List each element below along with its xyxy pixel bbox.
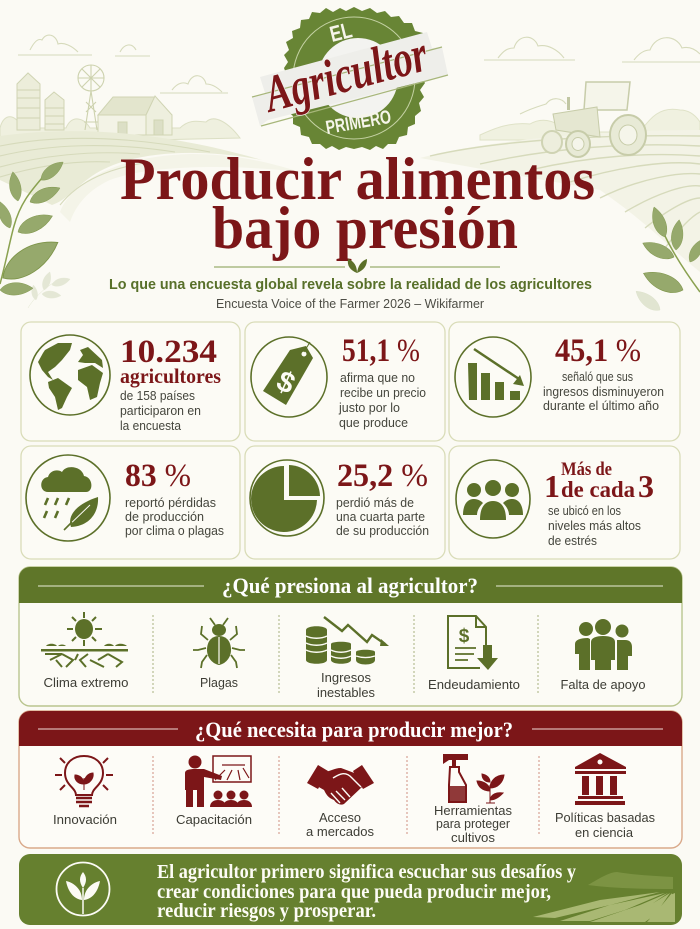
- icon: plant in circle: [56, 862, 110, 916]
- stat text: durante el último año: [543, 399, 659, 413]
- stat text: [544, 459, 654, 548]
- tractor: [542, 82, 646, 157]
- icon: pie chart: [250, 460, 324, 536]
- panel header: [19, 711, 682, 746]
- divider with sprout: [214, 259, 500, 273]
- title: bajo presión: [212, 195, 518, 261]
- stat text: señaló que sus: [562, 370, 633, 384]
- panel: income stat: [449, 322, 680, 441]
- icon: globe: [30, 335, 110, 415]
- item: market access: [306, 765, 374, 839]
- stat text: justo por lo: [338, 401, 400, 415]
- stat text: agricultores: [120, 364, 221, 388]
- stat text: de cada: [561, 477, 635, 502]
- panel: stress stat: [449, 446, 680, 559]
- item: training: [176, 756, 252, 827]
- panel header: ¿Qué necesita para producir mejor?: [195, 717, 513, 742]
- item: crop protection tools: Herramientas: [434, 804, 512, 818]
- stat text: 1: [544, 468, 560, 504]
- stat text: [125, 458, 224, 538]
- item: unstable income: inestables: [317, 686, 375, 700]
- panel: fair price stat: [245, 322, 445, 441]
- silos: [17, 73, 64, 130]
- item: training: Capacitación: [176, 813, 252, 827]
- stat text: 83 %: [125, 458, 191, 494]
- source line: Encuesta Voice of the Farmer 2026 – Wikifarmer: [216, 297, 484, 311]
- stat text: [336, 458, 429, 538]
- icon: coin stacks and falling line: [306, 617, 389, 664]
- stat text: perdió más de: [336, 496, 414, 510]
- right field: [420, 130, 700, 272]
- panel header: [19, 567, 682, 603]
- icon: trainer at board with audience: [185, 756, 252, 807]
- stat text: una cuarta parte: [336, 510, 425, 524]
- clouds: [18, 35, 700, 114]
- closing message: El agricultor primero significa escuchar sus desafíos y: [157, 862, 576, 883]
- item: unstable income: [306, 617, 389, 700]
- icon: price tag: [251, 337, 327, 417]
- stat text: por clima o plagas: [125, 524, 224, 538]
- stat text: de estrés: [548, 534, 597, 548]
- stat text: 10.234: [120, 334, 217, 370]
- panel: production loss stat: [245, 446, 445, 559]
- stat text: participaron en: [120, 404, 201, 418]
- item: lack of support: [560, 619, 646, 692]
- icon: spray bottle and plant: [443, 754, 504, 803]
- stat text: de su producción: [336, 524, 429, 538]
- closing message: crear condiciones para que pueda producir mejor,: [157, 882, 551, 903]
- stat text: la encuesta: [120, 419, 181, 433]
- seal text: EL: [327, 17, 355, 47]
- item: pests: Plagas: [200, 676, 238, 690]
- left far trees: [0, 117, 240, 140]
- icon: document with down arrow: $: [459, 626, 470, 647]
- stat text: [338, 333, 426, 430]
- item: market access: Acceso: [319, 811, 361, 825]
- item: science-based policy: Políticas basadas: [555, 811, 655, 825]
- item: science-based policy: en ciencia: [575, 826, 633, 840]
- windmill: [78, 65, 104, 130]
- stat text: se ubicó en los: [548, 504, 621, 518]
- item: unstable income: Ingresos: [321, 671, 371, 685]
- icon: price tag: $: [272, 365, 300, 401]
- item: innovation: Innovación: [53, 813, 117, 827]
- item: lack of support: Falta de apoyo: [560, 678, 646, 692]
- icon: three standing people: [575, 619, 632, 670]
- icon: light bulb with sprout: [55, 756, 113, 806]
- stat text: de 158 países: [120, 389, 195, 403]
- panel: needs: [19, 711, 682, 848]
- item: science-based policy: [555, 753, 655, 840]
- logo seal: PRIMERO: [324, 107, 393, 139]
- stat text: 51,1 %: [342, 333, 420, 369]
- icon: beetle: [193, 618, 245, 668]
- stat text: 25,2 %: [337, 458, 428, 494]
- panel: farmers stat: [21, 322, 240, 441]
- item: debt: [428, 616, 520, 692]
- stat text: afirma que no: [340, 371, 415, 385]
- stat text: que produce: [339, 416, 408, 430]
- closing message: reducir riesgos y prosperar.: [157, 901, 376, 922]
- left leaves: [0, 158, 71, 308]
- closing message: [157, 862, 576, 922]
- banner field texture: [533, 872, 675, 922]
- item: market access: a mercados: [306, 825, 374, 839]
- panel: climate losses stat: [21, 446, 240, 559]
- item: crop protection tools: [434, 754, 512, 845]
- landscape illustration: [0, 35, 700, 272]
- icon: government building: [575, 753, 626, 805]
- logo seal: [252, 7, 448, 150]
- title: [120, 146, 595, 261]
- item: crop protection tools: para proteger: [436, 817, 510, 831]
- right far hills: [480, 109, 700, 140]
- item: extreme climate: [41, 612, 129, 690]
- right leaves: [632, 205, 700, 315]
- panel header: ¿Qué presiona al agricultor?: [222, 573, 478, 598]
- icon: handshake: [307, 765, 374, 805]
- stat text: ingresos disminuyeron: [543, 385, 664, 399]
- stat text: recibe un precio: [340, 386, 426, 400]
- stat text: 45,1 %: [555, 333, 641, 369]
- icon: sun over cracked soil: [41, 612, 128, 667]
- left hills: [0, 131, 262, 205]
- stat text: reportó pérdidas: [125, 496, 216, 510]
- item: innovation: [53, 756, 117, 827]
- stat text: 3: [638, 468, 654, 504]
- stat text: Más de: [561, 459, 612, 480]
- panel: pressures: [19, 567, 682, 706]
- barn: [98, 96, 172, 135]
- item: extreme climate: Clima extremo: [44, 676, 129, 690]
- icon: falling bars: [455, 337, 531, 417]
- icon: rain cloud and leaf: [26, 455, 110, 541]
- seal badge: [283, 7, 425, 150]
- item: crop protection tools: cultivos: [451, 831, 495, 845]
- stat text: [120, 334, 221, 433]
- item: debt: Endeudamiento: [428, 678, 520, 692]
- subtitle: Lo que una encuesta global revela sobre la realidad de los agricultores: [109, 276, 592, 293]
- logo wordmark: Agricultor: [256, 25, 434, 124]
- title: Producir alimentos: [120, 146, 595, 212]
- stat text: de producción: [125, 510, 204, 524]
- icon: group of people: [456, 460, 530, 538]
- stat text: [543, 333, 664, 413]
- stat text: niveles más altos: [548, 519, 641, 533]
- closing banner: [19, 854, 682, 925]
- ribbon: [252, 32, 448, 126]
- item: pests: [193, 618, 245, 690]
